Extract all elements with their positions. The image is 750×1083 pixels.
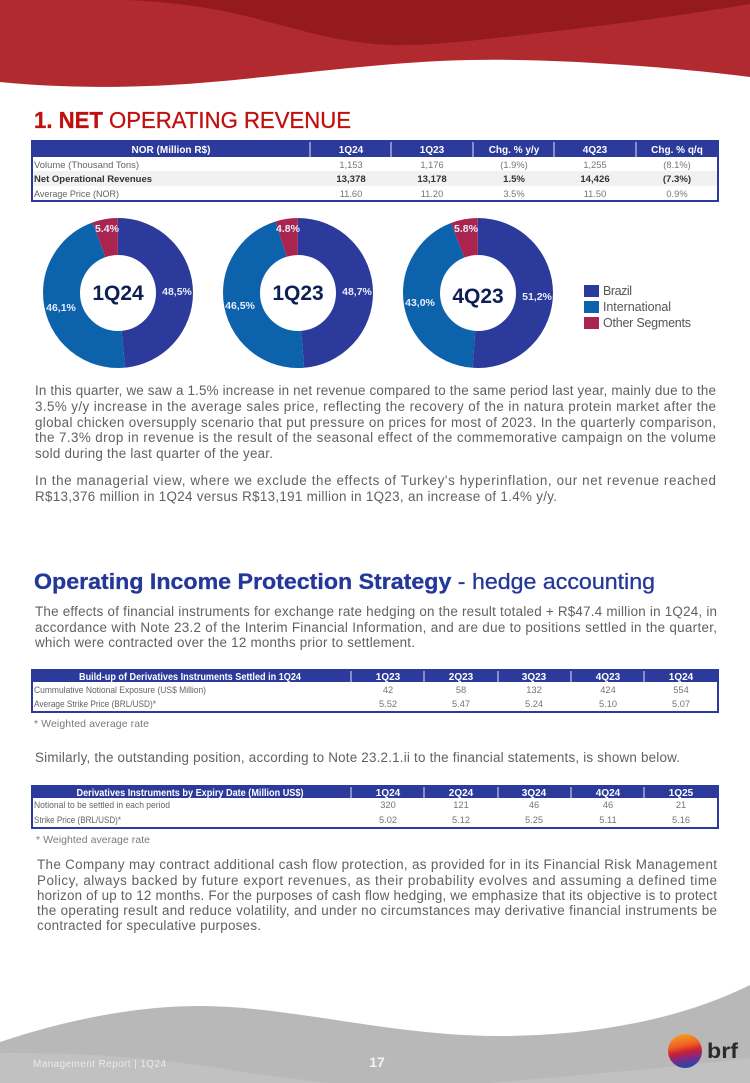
table: derivatives settled in 1Q24: 5.10 [599,699,617,709]
footer wave [0,985,750,1083]
table: derivatives settled in 1Q24: 5.52 [379,699,397,709]
donut chart: 4Q23: 4Q23 [452,285,504,308]
table: derivatives by expiry date: 4Q24 [596,788,621,799]
table: net operating revenue: 1,255 [583,160,607,170]
table: net operating revenue: Chg. % y/y [489,145,540,156]
table: derivatives settled in 1Q24: 132 [526,685,542,695]
donut chart: 1Q23: 48,7% [342,286,373,298]
footnote: * Weighted average rate [34,718,149,730]
paragraph: cash flow protection [37,857,717,933]
donut chart: 4Q23: 51,2% [522,291,553,303]
table: derivatives by expiry date: 121 [453,800,469,810]
paragraph: cash flow protection: horizon of up to 12 months. For the purposes of cash flow hedging, we emphasize that its objective is to protect [37,888,717,903]
donut chart: 4Q23: 43,0% [405,297,436,309]
table: derivatives settled in 1Q24: 1Q23 [376,672,401,683]
table: net operating revenue: (7.3%) [663,174,691,185]
table: net operating revenue: 11.60 [340,189,362,199]
legend: Other Segments [603,316,691,330]
table: derivatives by expiry date: Notional to be settled in each period [34,800,170,810]
table: net operating revenue: 3.5% [503,189,525,199]
table: derivatives settled in 1Q24: 2Q23 [449,672,474,683]
paragraph: managerial view: In the managerial view, where we exclude the effects of Turkey's hyperinflation, our net revenue reached [35,473,716,488]
paragraph: revenue analysis: global chicken oversupply scenario that put pressure on prices for most of 2023. In the quarterly comparison, [35,415,716,430]
legend [584,284,691,330]
paragraph: cash flow protection: Policy, always backed by future export revenues, as their probability evolves and assuming a defined time [37,873,717,888]
table: net operating revenue: 14,426 [580,174,610,185]
table: net operating revenue: Volume (Thousand Tons) [34,160,139,170]
donut chart: 1Q23: 1Q23 [272,282,324,305]
donut chart: 4Q23 [405,223,553,350]
donut chart: 4Q23: 5.8% [454,223,479,235]
table: net operating revenue [31,140,719,202]
donut chart: 1Q23: 46,5% [225,300,256,312]
table: net operating revenue: Chg. % q/q [651,145,703,156]
paragraph: managerial view [35,473,716,504]
table: net operating revenue: (8.1%) [663,160,691,170]
table: derivatives by expiry date: Strike Price (BRL/USD)* [34,815,121,825]
paragraph: revenue analysis: the 7.3% drop in revenue is the result of the seasonal effect of the commemorative campaign on the volume [35,430,716,445]
heading: operating income protection strategy: Operating Income Protection Strategy - hedge accounting [34,569,655,594]
header wave [0,0,750,87]
table: derivatives settled in 1Q24: 1Q24 [669,672,694,683]
table: derivatives settled in 1Q24: 4Q23 [596,672,621,683]
table: derivatives by expiry date: 1Q25 [669,788,694,799]
table: derivatives settled in 1Q24: Average Strike Price (BRL/USD)* [34,699,156,709]
table: derivatives settled in 1Q24: 5.47 [452,699,470,709]
table: net operating revenue: (1.9%) [500,160,528,170]
paragraph: revenue analysis [35,383,716,461]
table: net operating revenue: 1Q24 [339,145,364,156]
table: derivatives settled in 1Q24 [31,669,719,713]
table: derivatives by expiry date: 3Q24 [522,788,547,799]
donut chart: 1Q23 [225,223,373,350]
donut chart: 1Q24: 1Q24 [92,282,144,305]
paragraph: cash flow protection: The Company may contract additional cash flow protection, as provided for in its Financial Risk Management [37,857,717,872]
table: net operating revenue: NOR (Million R$) [132,145,210,156]
table: derivatives by expiry date: Derivatives Instruments by Expiry Date (Million US$) [76,788,304,799]
paragraph: hedging effects: accordance with Note 23.2 of the Interim Financial Information, and are due to positions settled in the quarter, [35,620,717,635]
table: derivatives by expiry date: 5.16 [672,815,690,825]
table: derivatives by expiry date: 21 [676,800,686,810]
table: derivatives settled in 1Q24: 5.07 [672,699,690,709]
paragraph: cash flow protection: contracted for speculative purposes. [37,918,261,933]
paragraph: managerial view: R$13,376 million in 1Q24 versus R$13,191 million in 1Q23, an increase of 1.4% y/y. [35,489,557,504]
paragraph: cash flow protection: the operating result and reduce volatility, and under no circumstances may derivative financial instruments be [37,903,717,918]
table: net operating revenue: 4Q23 [583,145,608,156]
table: derivatives by expiry date: 46 [529,800,539,810]
table: derivatives by expiry date: 5.02 [379,815,397,825]
paragraph: revenue analysis: In this quarter, we saw a 1.5% increase in net revenue compared to the same period last year, mainly due to the [35,383,716,398]
icon: brf logo [668,1034,739,1068]
table: net operating revenue: 1Q23 [420,145,445,156]
table: derivatives settled in 1Q24: 42 [383,685,393,695]
table: derivatives by expiry date: 320 [380,800,396,810]
donut chart: 1Q23: 4.8% [276,223,301,235]
table: derivatives settled in 1Q24: Build-up of Derivatives Instruments Settled in 1Q24 [79,672,301,683]
paragraph: hedging effects: which were contracted over the 12 months prior to settlement. [34,635,415,650]
donut chart: 1Q24: 46,1% [46,302,77,314]
table: derivatives by expiry date: 46 [603,800,613,810]
table: net operating revenue: 11.50 [584,189,606,199]
paragraph: hedging effects: The effects of financial instruments for exchange rate hedging on the result totaled + R$47.4 million in 1Q24, in [35,604,717,619]
icon: brf logo: brf [707,1040,739,1063]
paragraph: revenue analysis: sold during the last quarter of the year. [35,446,273,461]
donut chart: 1Q24: 48,5% [162,286,193,298]
page number: 17 [369,1054,385,1070]
table: derivatives by expiry date: 2Q24 [449,788,474,799]
paragraph: outstanding position: Similarly, the outstanding position, according to Note 23.2.1.ii to the financial statements, is shown below. [35,750,680,765]
paragraph: revenue analysis: 3.5% y/y increase in the average sales price, reflecting the recovery of the in natura protein market after the [35,399,716,414]
paragraph: hedging effects [34,604,717,650]
table: derivatives settled in 1Q24: 424 [600,685,616,695]
table: net operating revenue: 13,178 [417,174,447,185]
table: net operating revenue: 11.20 [421,189,443,199]
table: derivatives by expiry date: 5.25 [525,815,543,825]
table: net operating revenue: 1,176 [420,160,444,170]
table: net operating revenue: Net Operational Revenues [34,174,152,184]
table: net operating revenue: 13,378 [336,174,366,185]
title: net operating revenue: 1. NET OPERATING REVENUE [34,107,351,133]
table: derivatives settled in 1Q24: 554 [673,685,689,695]
table: derivatives by expiry date: 5.11 [599,815,617,825]
footer label: Management Report | 1Q24 [33,1059,166,1070]
donut chart: 1Q24: 5.4% [95,223,120,235]
table: net operating revenue: 1,153 [339,160,363,170]
table: derivatives settled in 1Q24: 5.24 [525,699,543,709]
donut chart: 1Q24 [46,223,193,350]
table: net operating revenue: 0.9% [666,189,688,199]
table: derivatives by expiry date [31,785,719,829]
table: net operating revenue: 1.5% [503,174,525,185]
table: derivatives settled in 1Q24: 58 [456,685,466,695]
table: derivatives settled in 1Q24: Cummulative Notional Exposure (US$ Million) [34,685,206,695]
table: net operating revenue: Average Price (NOR) [34,189,119,199]
table: derivatives by expiry date: 1Q24 [376,788,401,799]
legend: International [603,300,671,314]
table: derivatives settled in 1Q24: 3Q23 [522,672,547,683]
footnote: * Weighted average rate [36,834,150,846]
legend: Brazil [603,284,632,298]
table: derivatives by expiry date: 5.12 [452,815,470,825]
